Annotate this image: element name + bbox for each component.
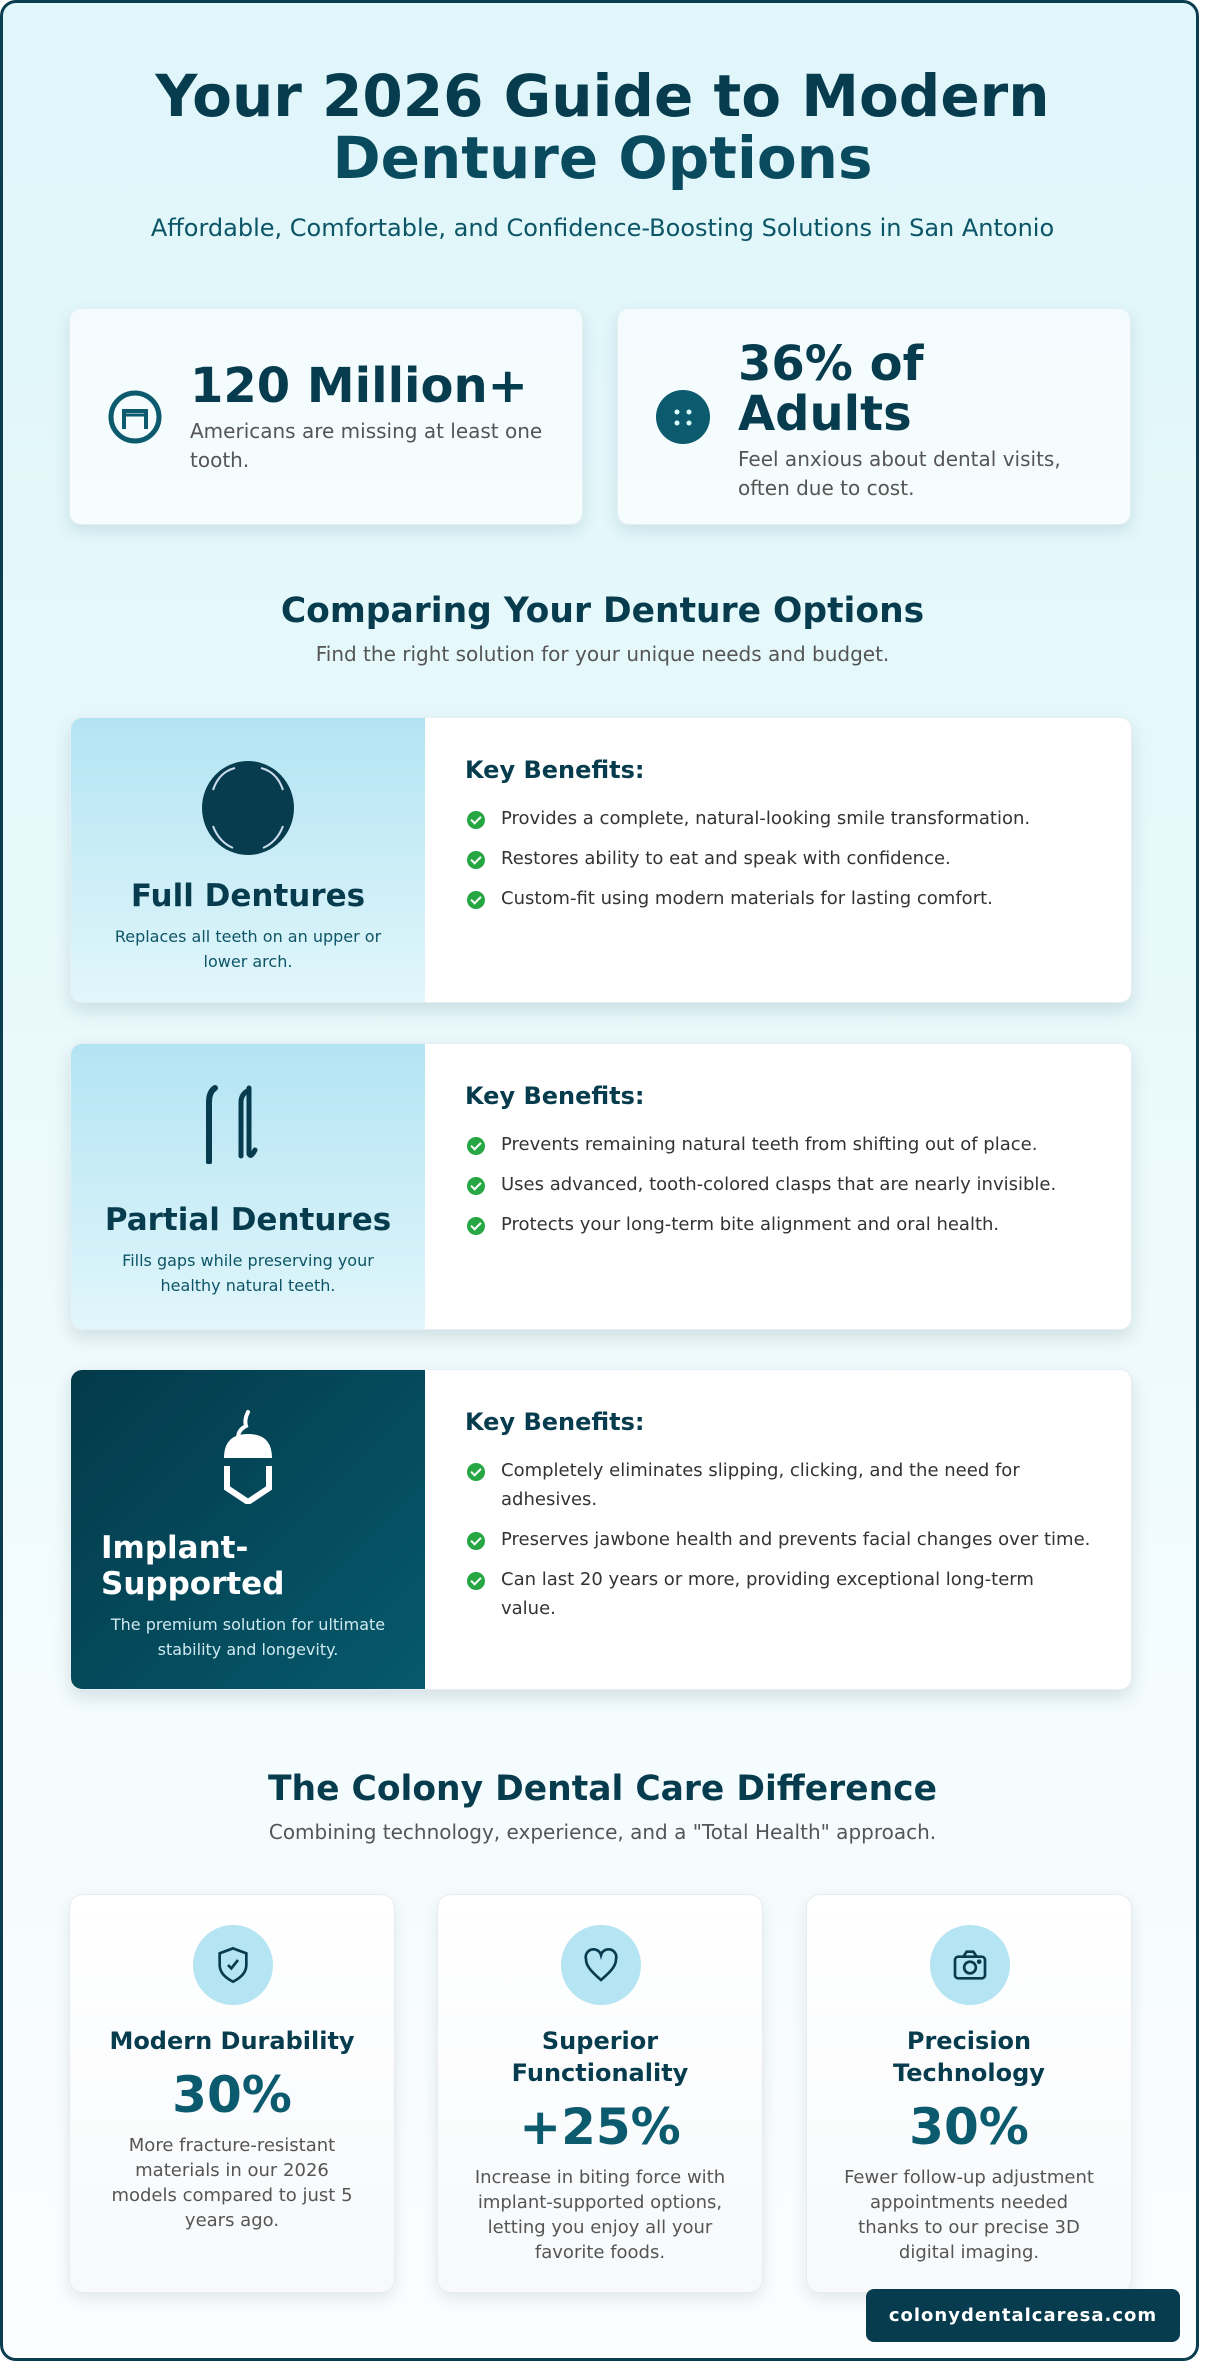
icon: implant bbox=[224, 1410, 272, 1504]
feature card: precision bbox=[806, 1894, 1132, 2293]
icon: anxious face bbox=[656, 390, 710, 444]
icon: full denture bbox=[202, 761, 294, 855]
panel: full dentures bbox=[70, 717, 1132, 1003]
url badge bbox=[866, 2289, 1180, 2342]
heading: difference: The Colony Dental Care Difference bbox=[268, 1769, 937, 1809]
panel: full dentures: Restores ability to eat and speak with confidence. bbox=[501, 848, 951, 869]
title: Denture Options bbox=[332, 124, 872, 192]
feature card: precision: Fewer follow-up adjustment appointments needed thanks to our precise 3D digital imaging. bbox=[844, 2167, 1094, 2263]
panel: partial dentures bbox=[70, 1043, 1132, 1330]
panel: partial dentures: Protects your long-term bite alignment and oral health. bbox=[501, 1214, 999, 1235]
panel: implant-supported: Key Benefits: bbox=[465, 1408, 645, 1436]
panel: partial dentures: Partial Dentures bbox=[105, 1202, 391, 1238]
panel: full dentures: Provides a complete, natural-looking smile transformation. bbox=[501, 808, 1030, 829]
icon: shield bbox=[193, 1925, 273, 2005]
title: Your 2026 Guide to Modern bbox=[155, 62, 1050, 130]
panel: implant-supported: Completely eliminates slipping, clicking, and the need for adhesives. bbox=[501, 1460, 1020, 1510]
stat card: 120 million bbox=[69, 308, 583, 525]
stat card: 36%: Adults bbox=[738, 386, 912, 442]
panel: implant-supported bbox=[70, 1369, 1132, 1690]
feature card: functionality: Increase in biting force with implant-supported options, letting you enjoy all your favorite foods. bbox=[475, 2167, 725, 2263]
panel: implant-supported: Supported bbox=[101, 1566, 284, 1602]
feature card: durability: 30% bbox=[172, 2066, 292, 2124]
icon: tooth ring bbox=[108, 390, 162, 444]
feature card: precision: Precision bbox=[907, 2027, 1031, 2055]
feature card: durability: Modern Durability bbox=[109, 2027, 355, 2055]
icon: partial denture clasps bbox=[206, 1085, 258, 1164]
feature card: functionality bbox=[437, 1894, 763, 2293]
panel: implant-supported: Preserves jawbone health and prevents facial changes over time. bbox=[501, 1529, 1090, 1550]
panel: implant-supported: Implant- bbox=[101, 1530, 248, 1566]
panel: implant-supported: Can last 20 years or more, providing exceptional long-term value. bbox=[501, 1569, 1034, 1619]
panel: partial dentures: Uses advanced, tooth-colored clasps that are nearly invisible. bbox=[501, 1174, 1056, 1195]
subheading: Find the right solution for your unique needs and budget. bbox=[316, 642, 889, 666]
panel: full dentures: Key Benefits: bbox=[465, 756, 645, 784]
feature card: functionality: Functionality bbox=[512, 2059, 688, 2087]
url badge: colonydentalcaresa.com bbox=[889, 2305, 1157, 2326]
subheading: Combining technology, experience, and a "Total Health" approach. bbox=[269, 1820, 936, 1844]
feature card: durability: More fracture-resistant materials in our 2026 models compared to just 5 years ago. bbox=[111, 2135, 353, 2231]
title bbox=[154, 62, 1050, 192]
stat card: 120 million: 120 Million+ bbox=[190, 358, 528, 414]
panel: full dentures: Full Dentures bbox=[131, 878, 365, 914]
stat card: 120 million: Americans are missing at least one tooth. bbox=[190, 419, 542, 472]
panel: full dentures: Custom-fit using modern materials for lasting comfort. bbox=[501, 888, 993, 909]
stat card: 36% bbox=[617, 308, 1131, 525]
heading: comparing: Comparing Your Denture Options bbox=[281, 591, 924, 631]
icon: heart bbox=[561, 1925, 641, 2005]
icon: camera bbox=[930, 1925, 1010, 2005]
subtitle: Affordable, Comfortable, and Confidence-Boosting Solutions in San Antonio bbox=[151, 214, 1054, 242]
stat card: 36%: Feel anxious about dental visits, often due to cost. bbox=[738, 447, 1061, 500]
panel: implant-supported: The premium solution for ultimate stability and longevity. bbox=[111, 1615, 385, 1659]
feature card: durability bbox=[69, 1894, 395, 2293]
panel: partial dentures: Prevents remaining natural teeth from shifting out of place. bbox=[501, 1134, 1037, 1155]
feature card: precision: Technology bbox=[893, 2059, 1045, 2087]
feature card: precision: 30% bbox=[909, 2098, 1029, 2156]
panel: full dentures: Replaces all teeth on an upper or lower arch. bbox=[115, 927, 381, 971]
feature card: functionality: +25% bbox=[519, 2098, 681, 2156]
stat card: 36%: 36% of bbox=[738, 336, 923, 392]
panel: partial dentures: Fills gaps while preserving your healthy natural teeth. bbox=[122, 1251, 374, 1295]
feature card: functionality: Superior bbox=[542, 2027, 658, 2055]
panel: partial dentures: Key Benefits: bbox=[465, 1082, 645, 1110]
